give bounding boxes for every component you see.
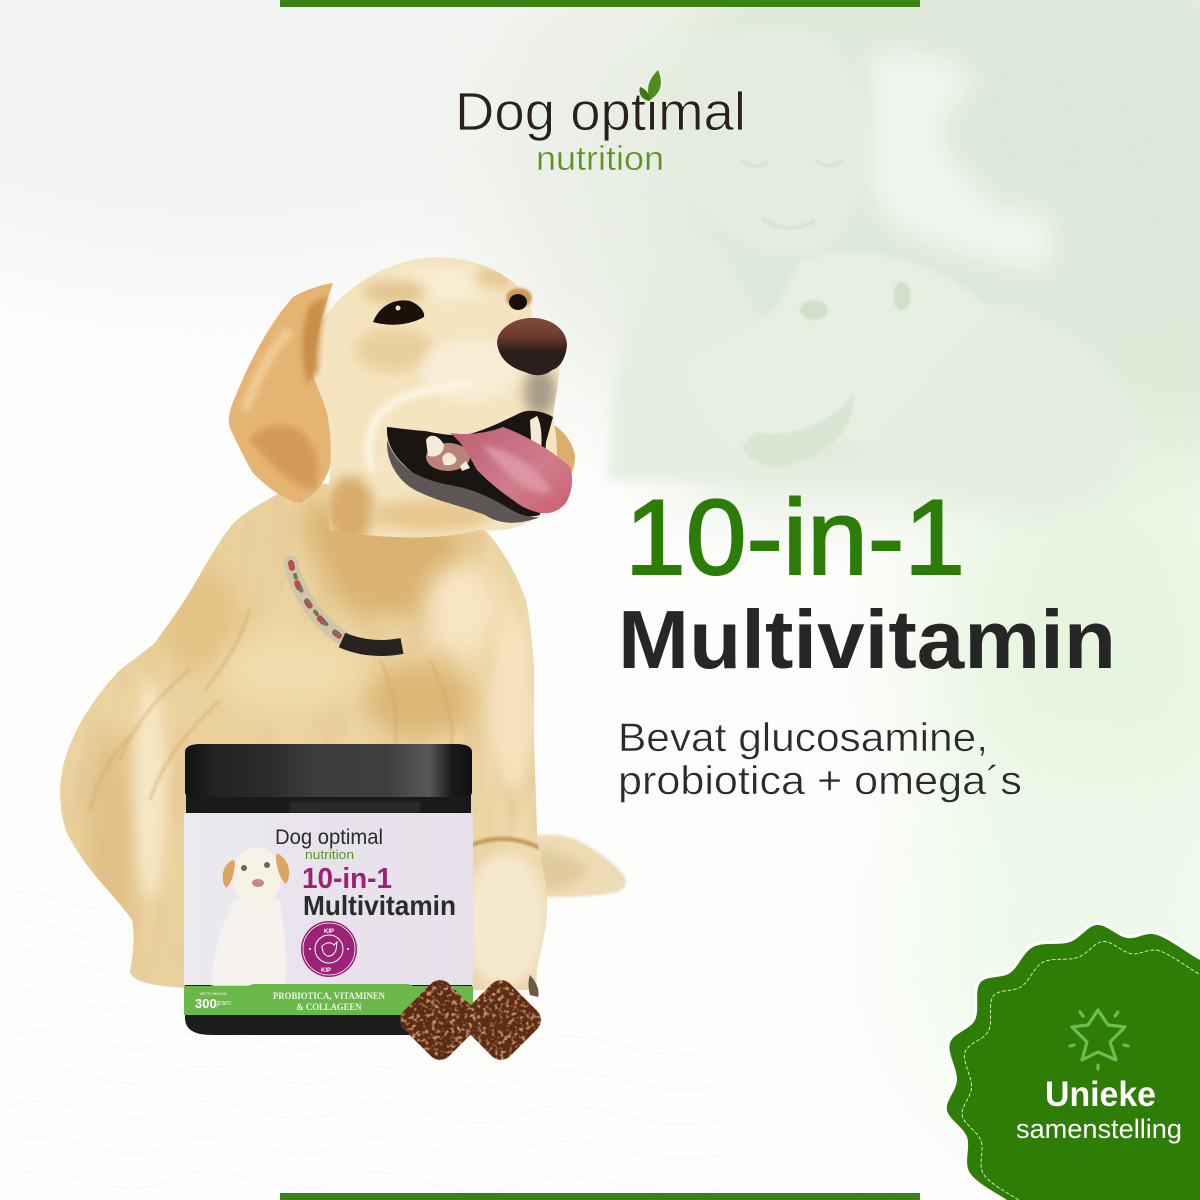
jar label: [184, 813, 473, 987]
dog illustration: [40, 245, 626, 1000]
flavour seal: KIP: [321, 968, 331, 974]
flavour seal: [301, 921, 357, 977]
ghost dog mouth: [742, 392, 854, 466]
dog: far paw shade: [535, 850, 590, 890]
dog: collar: [291, 563, 402, 648]
dog: right ear: [535, 420, 575, 485]
label 10-in-1: 10-in-1: [302, 863, 392, 895]
logo wordmark: Dog optimal: [455, 82, 746, 142]
badge scalloped shape: [947, 925, 1200, 1200]
net weight: NETTO INHOUD: [200, 992, 227, 996]
badge: unieke samenstelling: [947, 925, 1200, 1200]
band claim: PROBIOTICA, VITAMINEN: [273, 991, 385, 1001]
chew right: [456, 975, 546, 1065]
dog: tongue: [450, 427, 572, 513]
chew left: [395, 975, 485, 1065]
dog: toe nails: [528, 975, 539, 997]
product jar: [184, 744, 473, 1035]
dog: far paw: [532, 835, 626, 897]
flavour seal: KIP: [324, 929, 334, 935]
dog: teeth: [426, 416, 542, 471]
band claim: & COLLAGEEN: [296, 1002, 362, 1012]
texture lines: [920, 20, 1200, 242]
net weight: gram: [215, 1000, 231, 1007]
dog: mouth interior: [387, 411, 553, 517]
label nutrition: nutrition: [305, 847, 354, 862]
headline: Multivitamin: Multivitamin: [618, 593, 1116, 686]
child face features: [742, 160, 842, 228]
subheading: [618, 716, 1022, 803]
tongue highlight: [482, 445, 552, 493]
band claim: [273, 991, 385, 1012]
ghost dog head: [689, 252, 1002, 456]
icon: leaves: [639, 70, 661, 101]
headline: [618, 477, 1116, 686]
dog: body: [60, 483, 548, 990]
label green band: [184, 984, 473, 1015]
label dog: [212, 847, 289, 987]
net weight: 300: [195, 996, 217, 1011]
subheading: probiotica + omega´s: [618, 759, 1022, 803]
logo subline: nutrition: [536, 140, 664, 178]
chew treats: [395, 975, 546, 1065]
jar neck highlight: [290, 802, 420, 813]
dog: left ear: [229, 283, 333, 503]
net weight: [195, 992, 231, 1011]
headline: 10-in-1: 10-in-1: [625, 477, 965, 597]
top accent bar: [280, 0, 920, 7]
label Multivitamin: Multivitamin: [303, 890, 456, 921]
child head: [663, 26, 863, 256]
ghost dog eyes: [800, 282, 911, 320]
bottom accent bar: [280, 1193, 920, 1200]
background light patches: [867, 50, 1054, 270]
dog: gum: [426, 443, 470, 471]
badge subtitle: samenstelling: [1016, 1114, 1182, 1144]
badge dashed inner line: [962, 941, 1200, 1200]
dog: ear shading: [245, 295, 328, 490]
jar base: [185, 970, 472, 1035]
child body: [608, 235, 790, 480]
faint wave pattern: [0, 891, 720, 1194]
label logo: Dog optimal: [275, 826, 383, 849]
dog: right eye: [506, 288, 532, 310]
subheading: Bevat glucosamine,: [618, 716, 988, 760]
dog: lower lip: [387, 440, 540, 523]
dog: left eye: [373, 300, 424, 325]
icon: star: [1070, 1010, 1128, 1069]
dog: nose: [497, 318, 567, 375]
jar lid: [185, 744, 472, 797]
dog: head: [314, 257, 560, 538]
jar neck: [186, 795, 471, 817]
brand logo: [455, 70, 746, 178]
ghosted photo: child and dog: [608, 20, 1200, 520]
ghost dog body: [860, 305, 1138, 520]
badge title: Unieke: [1045, 1075, 1156, 1114]
